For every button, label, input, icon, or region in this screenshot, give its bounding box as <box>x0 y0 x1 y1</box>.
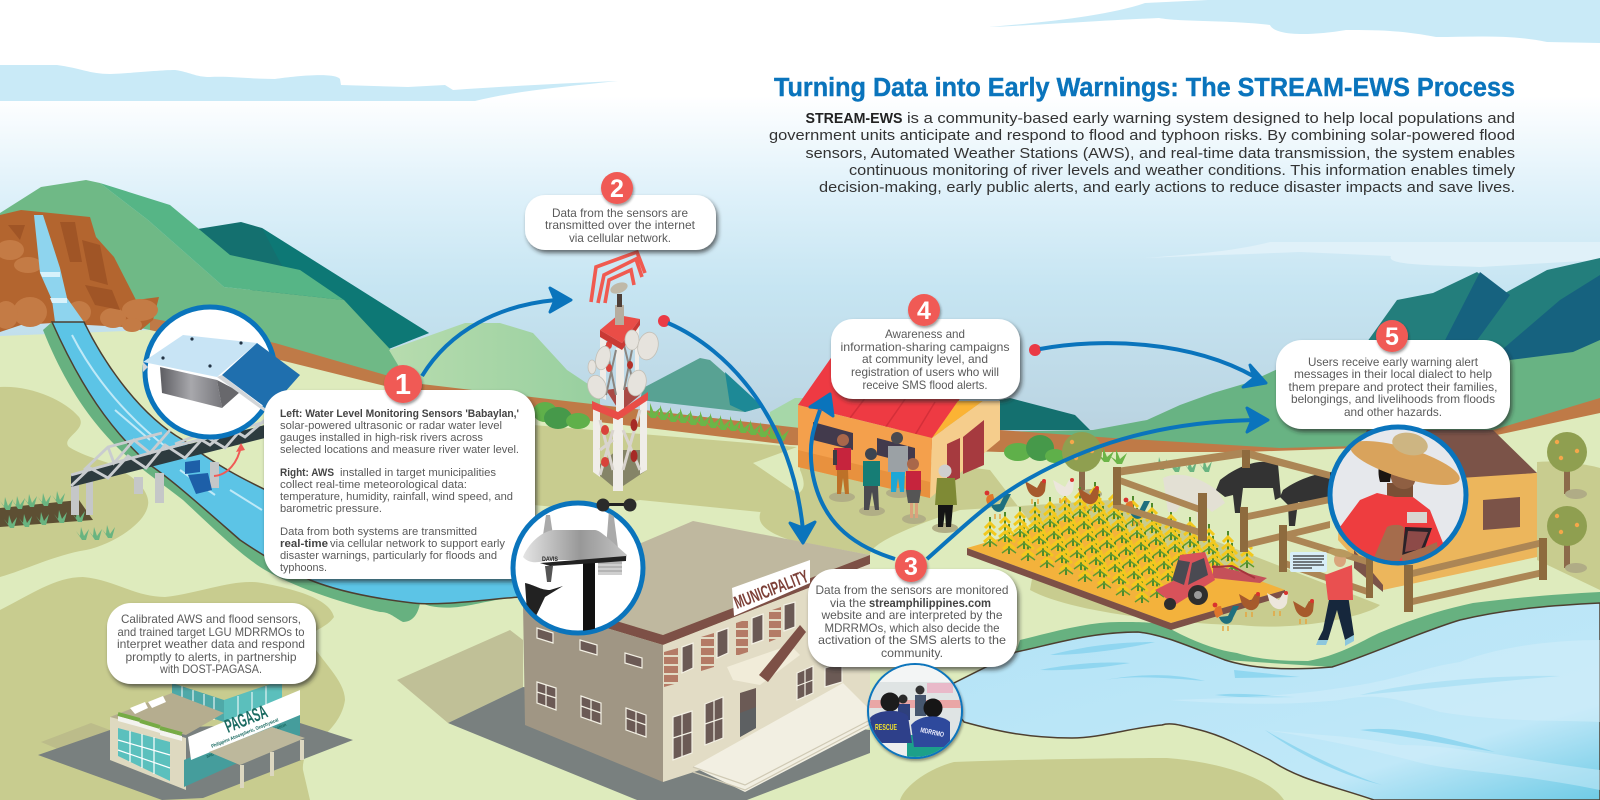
bridge with sensor <box>71 420 265 515</box>
bushes behind tower <box>533 402 1065 463</box>
intro paragraph: decision-making, early public alerts, and early actions to reduce disaster impacts and save lives. <box>819 180 1515 196</box>
intro paragraph: is a community-based early warning system designed to help local populations and <box>907 111 1515 127</box>
card 1 sensors: disaster warnings, particularly for floods and <box>280 550 497 562</box>
photo: MDRRMO training: MDRRMO <box>920 727 945 739</box>
badge 2 <box>601 172 633 204</box>
card 2 <box>525 195 716 250</box>
barn right <box>1338 430 1537 592</box>
cows <box>1163 462 1335 526</box>
card 3: MDRRMOs, which also decide the <box>824 622 1000 635</box>
mountains center <box>640 358 1090 430</box>
card 3: activation of the SMS alerts to the <box>818 634 1006 647</box>
farmhouse <box>798 345 1000 498</box>
card 4: registration of users who will <box>851 366 999 379</box>
card 0 PAGASA: with DOST-PAGASA. <box>159 663 262 676</box>
PAGASA building: PAGASA <box>222 702 271 738</box>
card 5: Users receive early warning alert <box>1308 356 1479 369</box>
card 2: via cellular network. <box>569 232 671 245</box>
badge 3 <box>895 550 927 582</box>
card 5: them prepare and protect their families, <box>1288 381 1498 394</box>
card 1 sensors: real-time <box>280 538 328 550</box>
card 4: Awareness and <box>885 328 965 341</box>
fences front <box>1279 525 1547 612</box>
ground <box>0 330 1600 800</box>
card 2: Data from the sensors are <box>552 207 688 220</box>
badge 4 <box>908 294 940 326</box>
intro paragraph: sensors, Automated Weather Stations (AWS), and real-time data transmission, the system enables <box>806 146 1515 162</box>
farmer small with phone bubble <box>1290 547 1354 646</box>
river right <box>940 592 1600 800</box>
intro paragraph: government units anticipate and respond to flood and typhoon risks. By combining solar-powered flood <box>769 128 1515 144</box>
card 0 PAGASA: interpret weather data and respond <box>117 638 305 651</box>
arrow 3 to 4 <box>810 394 895 559</box>
card 1 sensors <box>264 390 535 579</box>
card 5: belongings, and livelihoods from floods <box>1291 393 1495 406</box>
card 0 PAGASA: Calibrated AWS and flood sensors, <box>121 613 301 626</box>
card 1 sensors: temperature, humidity, rainfall, wind speed, and <box>280 491 513 503</box>
grass strip <box>644 403 1212 472</box>
villagers <box>829 432 958 533</box>
card 4: at community level, and <box>862 353 988 366</box>
photo: MDRRMO training <box>865 660 965 760</box>
badge 1: 1 <box>395 369 411 401</box>
arrow 2 to 3 <box>658 315 815 543</box>
municipal building shadow <box>397 630 523 723</box>
cliff with waterfall <box>0 210 159 332</box>
swamp grass <box>0 491 115 540</box>
card 3: website and are interpreted by the <box>820 609 1002 622</box>
card 1 sensors: collect real-time meteorological data: <box>280 479 467 491</box>
municipality sign <box>731 560 811 616</box>
tractor <box>1155 552 1267 610</box>
sensor circle <box>143 307 300 437</box>
intro paragraph: STREAM-EWS <box>806 111 903 127</box>
cloud mid right <box>1145 242 1600 267</box>
card 2: transmitted over the internet <box>545 219 696 232</box>
card 1 sensors: Right: AWS <box>280 467 334 479</box>
mountains right <box>1367 258 1600 400</box>
card 4: information-sharing campaigns <box>840 341 1010 354</box>
PAGASA building: and Astronomical Services Administration <box>206 722 287 760</box>
card 1 sensors: installed in target municipalities <box>340 467 497 479</box>
card 5: messages in their local dialect to help <box>1294 368 1492 381</box>
card 1 sensors: typhoons. <box>280 562 327 574</box>
signal waves <box>591 252 645 303</box>
photo: MDRRMO training: RESCUE <box>875 722 897 732</box>
card 1 sensors: gauges installed in high-risk rivers across <box>280 432 484 444</box>
intro paragraph <box>769 111 1516 196</box>
orchard trees <box>1547 432 1587 573</box>
municipality building <box>523 521 870 792</box>
card 3: community. <box>881 647 943 660</box>
brown road band <box>150 318 1600 470</box>
card 3 <box>808 569 1017 667</box>
card 3: Data from the sensors are monitored <box>816 584 1008 597</box>
cell tower <box>584 280 661 491</box>
weather station circle: DAVIS <box>542 556 559 563</box>
cloud top right <box>989 0 1600 43</box>
card 0 PAGASA: promptly to alerts, in partnership <box>126 651 296 664</box>
building ground shadow <box>448 687 870 800</box>
badge 3: 3 <box>904 553 918 581</box>
arrow 1 to 2 <box>422 288 571 376</box>
badge 5: 5 <box>1385 323 1399 351</box>
card 3: via the <box>830 597 866 610</box>
PAGASA ground shadows <box>38 723 353 800</box>
PAGASA building: Philippine Atmospheric, Geophysical <box>211 717 280 750</box>
PAGASA building <box>110 680 305 790</box>
olive ground patches <box>0 387 1600 800</box>
card 0 PAGASA: and trained target LGU MDRRMOs to <box>118 626 304 639</box>
cloud top left <box>0 65 618 101</box>
photo: farmer with phone <box>1330 427 1466 575</box>
card 1 sensors: Data from both systems are transmitted <box>280 526 477 538</box>
fences <box>1113 449 1330 552</box>
card 4: receive SMS flood alerts. <box>862 379 988 392</box>
arrow 4 to 5 <box>1029 343 1266 387</box>
card 5 <box>1276 340 1510 429</box>
card 3: streamphilippines.com <box>869 597 991 610</box>
card 1 sensors: barometric pressure. <box>280 503 382 515</box>
cropfield <box>967 482 1285 630</box>
card 0 PAGASA <box>107 603 316 684</box>
hill right <box>985 340 1600 450</box>
river left <box>43 322 520 622</box>
card 4 <box>831 319 1020 399</box>
mountains left <box>0 180 600 420</box>
badge 5 <box>1376 320 1408 352</box>
chickens <box>985 478 1314 631</box>
card 1 sensors: Left: Water Level Monitoring Sensors 'Babaylan,' <box>280 408 519 420</box>
card 5: and other hazards. <box>1344 406 1442 419</box>
badge 1 <box>384 365 422 403</box>
badge 2: 2 <box>610 175 624 203</box>
tree center <box>1062 432 1102 499</box>
card 1 sensors: via cellular network to support early <box>330 538 506 550</box>
municipality sign: MUNICIPALITY <box>731 566 811 613</box>
card 1 sensors: selected locations and measure river water level. <box>280 444 519 456</box>
card 1 sensors: solar-powered ultrasonic or radar water level <box>280 420 502 432</box>
arrow 3 to 5 <box>927 408 1268 559</box>
title: Turning Data into Early Warnings: The STREAM-EWS Process <box>774 74 1515 102</box>
intro paragraph: continuous monitoring of river levels and weather conditions. This information enables timely <box>849 163 1516 179</box>
badge 4: 4 <box>917 297 931 325</box>
weather station circle <box>513 498 643 640</box>
